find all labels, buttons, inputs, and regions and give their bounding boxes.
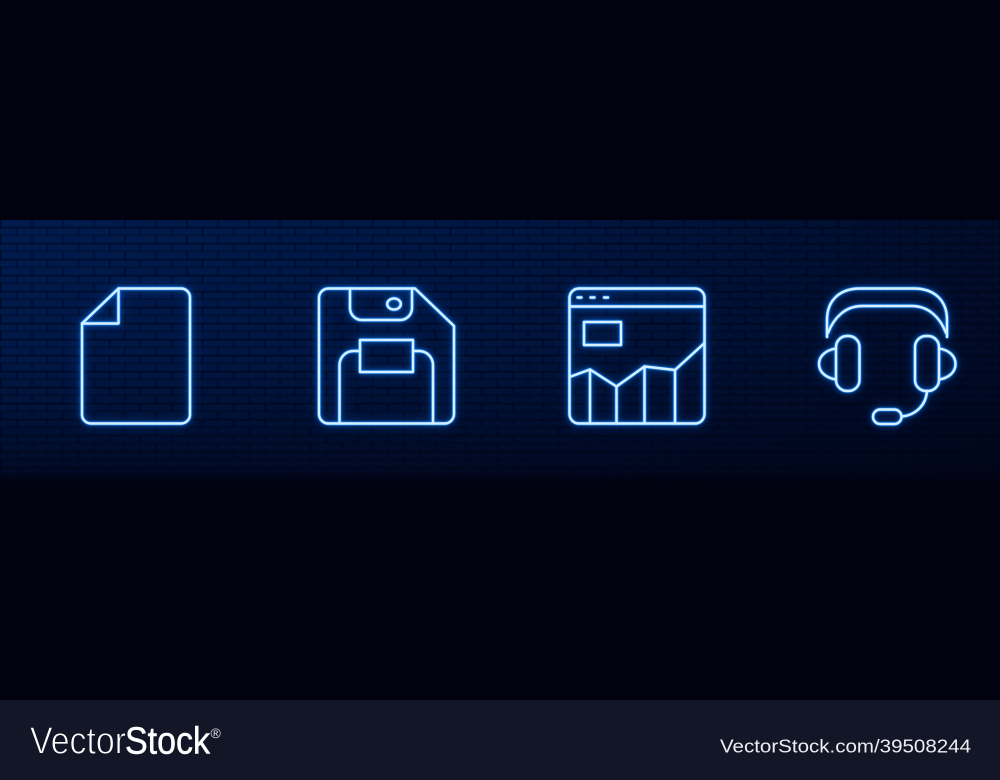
logo: VectorStock	[30, 720, 222, 762]
icon: headset	[819, 288, 956, 424]
icon: browser window with chart	[570, 288, 704, 424]
brick wall band	[0, 214, 1000, 488]
logo: VectorStock: Vector	[30, 720, 126, 762]
logo: VectorStock: ®	[210, 725, 222, 741]
icon: document file	[82, 288, 190, 424]
footer bar	[0, 700, 1000, 780]
logo: VectorStock: Stock	[125, 720, 211, 762]
site url and image id: VectorStock.com/39508244	[720, 736, 971, 756]
icon: floppy disk	[319, 288, 454, 424]
